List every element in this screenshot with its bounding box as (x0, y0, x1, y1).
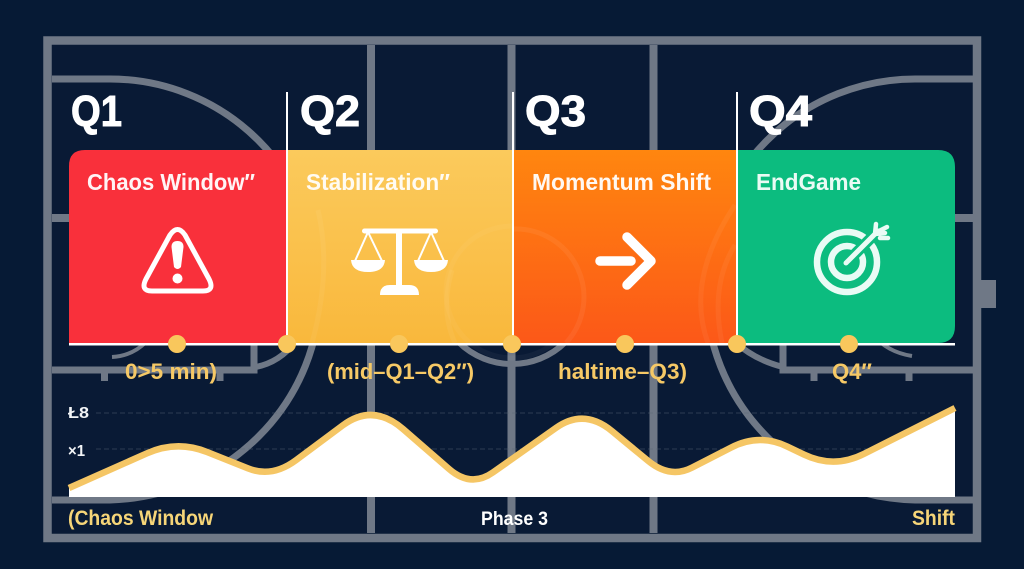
icon: target with arrow (817, 224, 888, 292)
chart area fill (69, 408, 955, 497)
quarter labels: Q1 (71, 87, 122, 136)
quarter labels: Q4 (749, 87, 813, 136)
chart axis labels (68, 405, 89, 460)
heading: Chaos Window: Chaos Window″ (87, 169, 255, 195)
heading: Momentum Shift: Momentum Shift (532, 169, 711, 195)
quarter labels: Q2 (300, 87, 360, 136)
timeline time labels: 0>5 min) (125, 359, 217, 384)
panel: Q2 Stabilization (288, 150, 578, 358)
quarter labels: Q3 (525, 87, 586, 136)
timeline time labels: (mid–Q1–Q2″) (327, 359, 474, 384)
chart trend line (69, 408, 955, 488)
timeline time labels: Q4″ (832, 359, 872, 384)
icon: balance scales (351, 228, 448, 295)
chart axis labels: Ł8 (68, 405, 89, 422)
chart axis labels: ×1 (68, 443, 85, 460)
timeline time labels (125, 359, 872, 384)
bottom labels (68, 507, 955, 530)
panel: Q1 Chaos Window (69, 150, 287, 343)
quarter labels (71, 87, 813, 136)
heading: Stabilization: Stabilization″ (306, 169, 450, 195)
timeline with markers (69, 335, 955, 353)
heading: EndGame: EndGame (756, 169, 861, 195)
momentum chart (68, 405, 955, 497)
icon: warning triangle (144, 230, 211, 291)
bottom labels: Shift (912, 507, 955, 530)
bottom labels: (Chaos Window (68, 507, 214, 530)
quarter dividers (287, 92, 737, 343)
timeline time labels: haltime–Q3) (558, 359, 687, 384)
panel: Q4 EndGame (738, 150, 955, 343)
icon: right arrow (600, 237, 651, 285)
bottom labels: Phase 3 (481, 509, 548, 530)
panel: Q3 Momentum Shift (514, 150, 737, 343)
